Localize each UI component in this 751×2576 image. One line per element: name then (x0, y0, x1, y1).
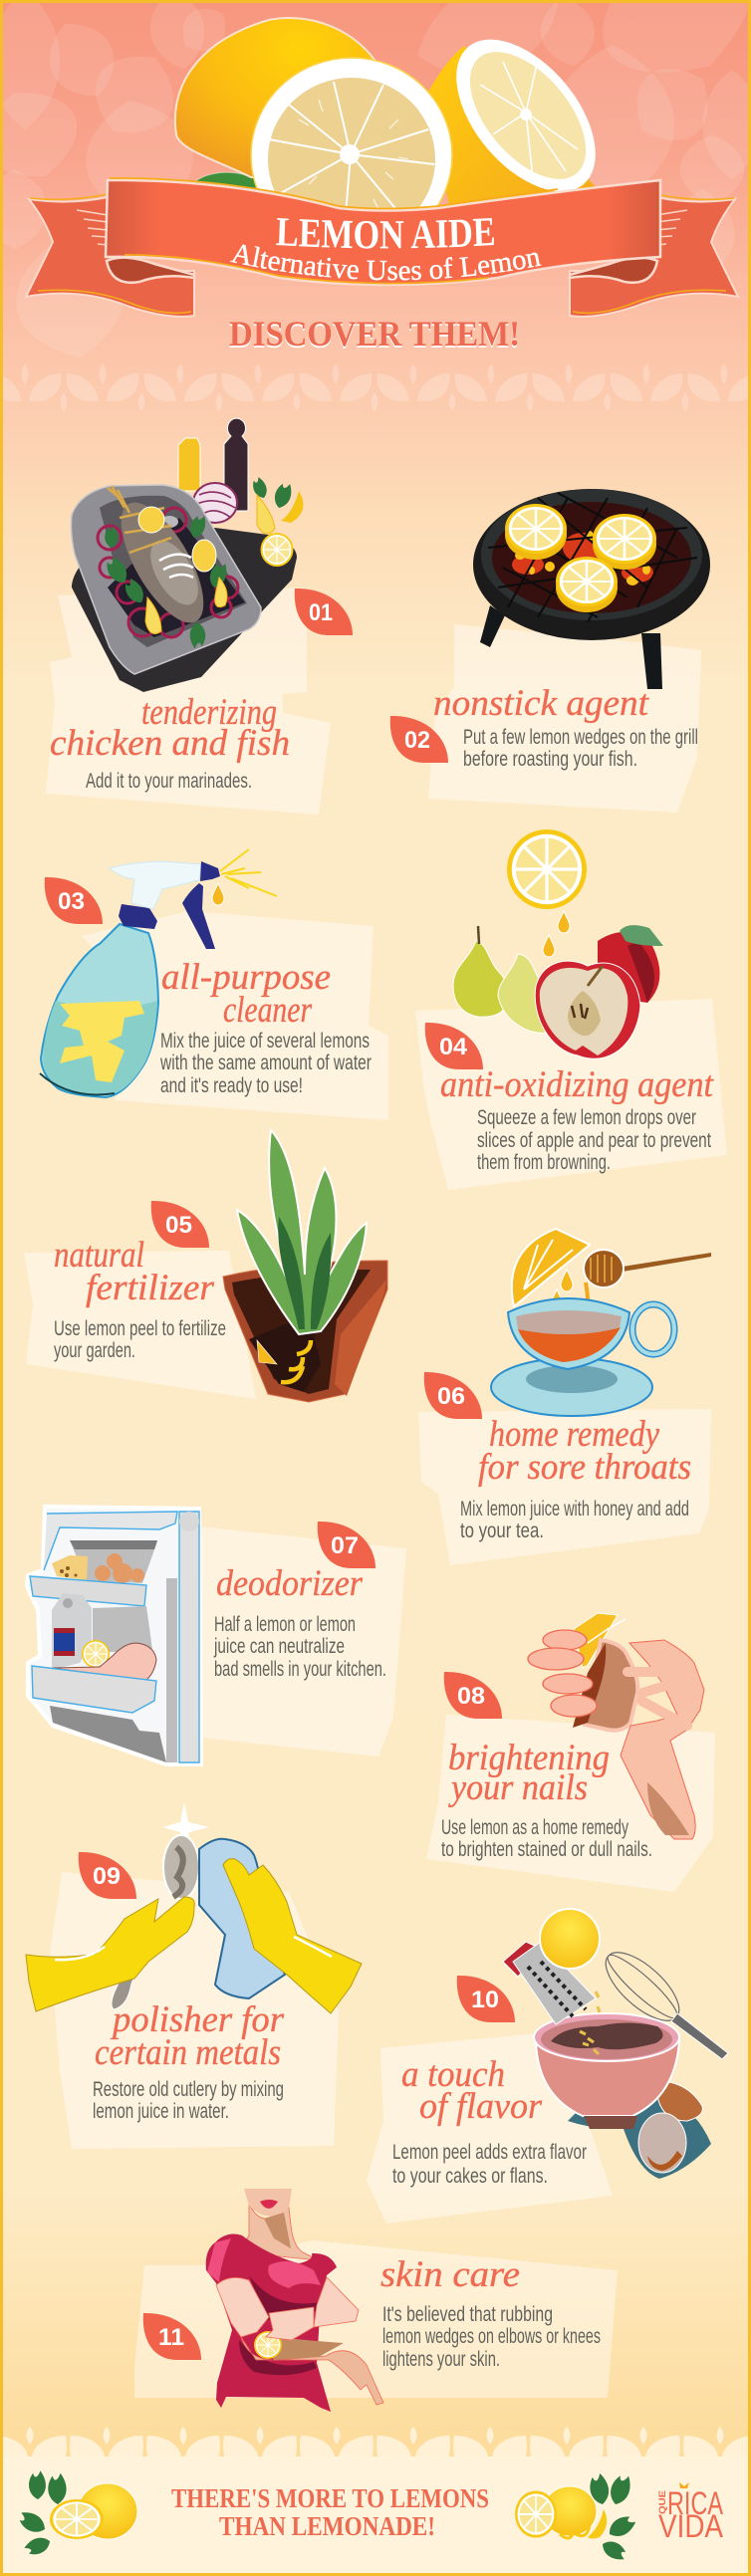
badge 03 (45, 877, 103, 924)
description: Half a lemon or lemon (214, 1613, 356, 1636)
description (477, 1106, 711, 1174)
icon: grater, whisk, bowl (503, 1909, 728, 2179)
description: Restore old cutlery by mixing (93, 2078, 284, 2101)
icon: spray bottle (40, 849, 277, 1097)
description: them from browning. (477, 1151, 611, 1174)
item 08 brightening your nails (426, 1613, 715, 1892)
heading: all-purpose (161, 957, 331, 998)
heading (50, 692, 290, 764)
discover heading: DISCOVER THEM! (229, 314, 520, 353)
logo: Que Rica Vida: RICA (667, 2485, 723, 2521)
heading: tenderizing (141, 692, 277, 733)
badge 05: 05 (165, 1212, 192, 1239)
description (213, 1613, 386, 1681)
badge 01: 01 (309, 599, 333, 626)
green leaf (187, 172, 257, 204)
description: bad smells in your kitchen. (214, 1658, 386, 1681)
heading: a touch (401, 2054, 505, 2095)
heading: skin care (380, 2254, 520, 2295)
paper tape (199, 1526, 406, 1756)
paper tape (24, 1251, 256, 1399)
icon: hands and lemon (528, 1613, 704, 1839)
description: lightens your skin. (382, 2348, 500, 2371)
ribbon title (234, 243, 538, 248)
description: and it's ready to use! (160, 1074, 303, 1097)
description (382, 2303, 601, 2371)
description: lemon juice in water. (93, 2100, 229, 2123)
header lemons (175, 14, 623, 253)
ribbon band (106, 180, 660, 285)
badge 05 (151, 1201, 209, 1248)
badge 08 (444, 1672, 502, 1719)
item 07 deodorizer (27, 1507, 406, 1764)
heading: chicken and fish (50, 723, 290, 764)
heading: for sore throats (478, 1447, 691, 1488)
item 01 tenderizing chicken and fish (46, 418, 353, 815)
description: Mix the juice of several lemons (160, 1030, 370, 1053)
paper tape (367, 2031, 613, 2224)
item 06 home remedy for sore throats (418, 1229, 711, 1565)
footer text: THAN LEMONADE! (219, 2511, 435, 2541)
badge 07: 07 (331, 1532, 359, 1559)
description: juice can neutralize (213, 1635, 345, 1658)
footer band (3, 2427, 748, 2573)
item 04 anti-oxidizing agent (415, 829, 727, 1190)
item 10 a touch of flavor (367, 1909, 728, 2224)
ribbon right tail (570, 194, 738, 317)
heading: polisher for (110, 1999, 285, 2040)
item 05 natural fertilizer (24, 1130, 387, 1402)
badge 06: 06 (437, 1383, 465, 1410)
description (460, 1498, 689, 1542)
ribbon banner (24, 177, 740, 318)
icon: woman with lemon (206, 2189, 383, 2412)
decorative leaves: header (0, 0, 751, 366)
heading: anti-oxidizing agent (440, 1064, 715, 1105)
badge 09: 09 (93, 1863, 121, 1890)
paper tape (134, 2240, 618, 2398)
badge 11: 11 (158, 2324, 184, 2351)
heading: fertilizer (86, 1268, 215, 1308)
description: Use lemon as a home remedy (441, 1816, 628, 1839)
heading (401, 2054, 543, 2127)
description: It's believed that rubbing (382, 2303, 553, 2326)
badge 08: 08 (457, 1683, 485, 1710)
description: Lemon peel adds extra flavor (392, 2141, 587, 2164)
description (93, 2078, 284, 2123)
footer text: THERE'S MORE TO LEMONS (171, 2483, 489, 2513)
paper tape (82, 911, 388, 1120)
heading: natural (54, 1235, 144, 1276)
description: your garden. (54, 1339, 135, 1362)
ribbon subtitle (219, 259, 553, 280)
icon: plant pot (223, 1130, 387, 1402)
paper tape (428, 624, 701, 813)
item 03 all-purpose cleaner (40, 849, 388, 1120)
middle lemon half (251, 58, 452, 253)
badge 04 (425, 1023, 483, 1069)
badge 03: 03 (58, 888, 85, 915)
description: before roasting your fish. (463, 748, 637, 771)
footer left lemons (16, 2470, 137, 2558)
paper tape (46, 587, 331, 815)
description: Add it to your marinades. (86, 770, 252, 793)
description (159, 1030, 372, 1097)
heading: your nails (447, 1767, 588, 1808)
icon: grill (473, 489, 710, 689)
paper tape (426, 1715, 715, 1892)
paper tape (50, 1872, 339, 2149)
badge 11 (143, 2313, 201, 2360)
heading (54, 1235, 215, 1308)
description: to your cakes or flans. (392, 2165, 548, 2188)
description (392, 2141, 587, 2188)
badge 10 (457, 1976, 515, 2022)
ribbon banner: Alternative Uses of Lemon (230, 245, 542, 281)
description: to your tea. (460, 1520, 544, 1542)
icon: lemon, pears, apples (453, 829, 663, 1058)
heading: certain metals (95, 2032, 281, 2073)
heading (447, 1738, 610, 1808)
icon: fish dish (71, 418, 303, 692)
whole lemon (175, 18, 384, 177)
heading: home remedy (489, 1414, 660, 1455)
ribbon banner: LEMON AIDE (276, 218, 494, 249)
description: Use lemon peel to fertilize (54, 1317, 226, 1340)
description: with the same amount of water (159, 1052, 372, 1074)
item 09 polisher for certain metals (26, 1802, 362, 2149)
footer text (171, 2483, 489, 2541)
heading: of flavor (419, 2086, 543, 2127)
description: to brighten stained or dull nails. (441, 1838, 652, 1861)
heading (161, 957, 331, 1031)
badge 06 (424, 1372, 482, 1419)
icon: tea and honey (491, 1229, 711, 1416)
badge 04: 04 (439, 1034, 468, 1060)
logo: Que Rica Vida: VIDA (658, 2508, 724, 2544)
paper tape (418, 1409, 711, 1565)
badge 10: 10 (471, 1987, 499, 2013)
heading (478, 1414, 691, 1488)
heading (95, 1999, 285, 2073)
description (54, 1317, 226, 1362)
ribbon left tail (26, 194, 194, 317)
badge 02: 02 (404, 727, 430, 754)
description (441, 1816, 652, 1861)
heading: deodorizer (216, 1563, 364, 1604)
icon: refrigerator (27, 1507, 201, 1764)
badge 07 (318, 1522, 376, 1568)
logo: Que Rica Vida: QUE (657, 2490, 667, 2514)
badge 09 (79, 1852, 136, 1899)
heading: cleaner (223, 990, 312, 1031)
heading: nonstick agent (433, 683, 650, 724)
heading: brightening (448, 1738, 610, 1778)
footer right lemons (515, 2471, 638, 2564)
description: lemon wedges on elbows or knees (382, 2325, 601, 2348)
badge 01 (295, 588, 353, 635)
decorative leaf row (3, 363, 748, 411)
badge 02 (390, 716, 448, 763)
item 11 skin care (134, 2189, 618, 2412)
discover heading: DISCOVER THEM! (229, 316, 520, 355)
icon: gloves, spoon, cloth (26, 1802, 362, 2013)
right lemon half (428, 14, 623, 217)
item 02 nonstick agent (390, 489, 710, 813)
paper tape (415, 999, 727, 1190)
logo: Que Rica Vida (657, 2482, 724, 2544)
description (463, 726, 698, 771)
